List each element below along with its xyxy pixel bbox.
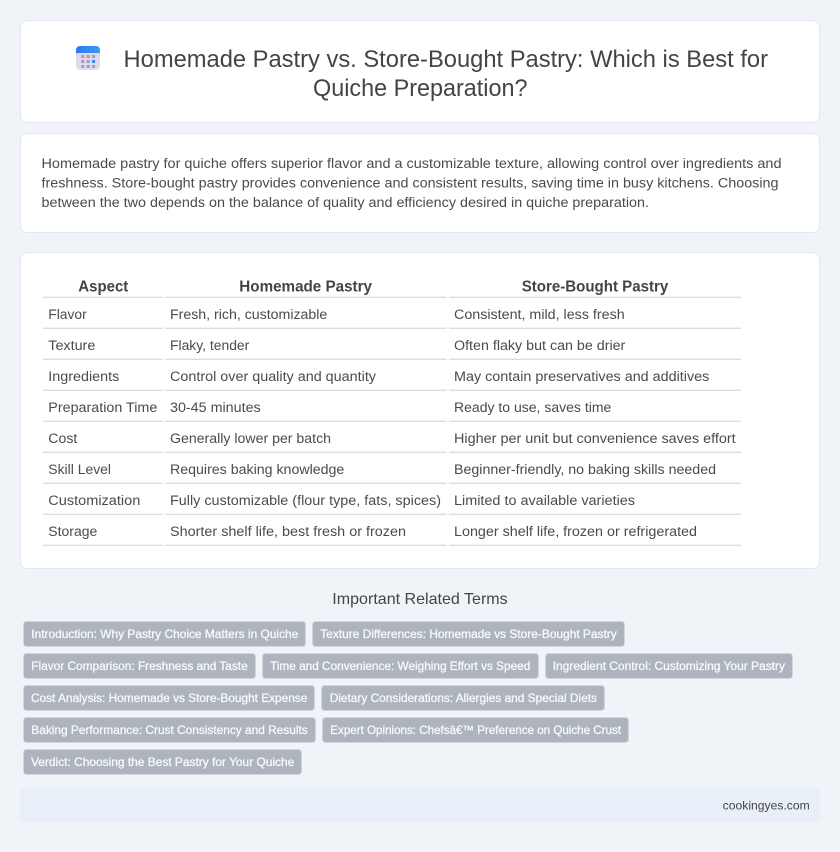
tag: flavor [24,654,256,678]
table header row [43,279,741,297]
table row: Cost: Generally lower per batch [170,431,331,447]
tag: introduction [24,622,306,646]
table row: Storage: Shorter shelf life, best fresh or frozen [170,524,406,540]
table row: Preparation Time: Preparation Time [48,400,157,416]
table row: Cost: Higher per unit but convenience saves effort [454,431,736,447]
tag: baking: Baking Performance: Crust Consistency and Results [31,723,308,737]
intro text block [42,156,782,211]
intro text block: Homemade pastry for quiche offers superior flavor and a customizable texture, allowing control over ingredients and [42,156,782,172]
tag: texture: Texture Differences: Homemade vs Store-Bought Pastry [320,627,617,641]
table row: Ingredients: Ingredients [48,369,119,385]
table row: Preparation Time [43,400,741,421]
section: related terms [24,591,792,774]
table row: Skill Level: Beginner-friendly, no baking skills needed [454,462,716,478]
table row: Texture [43,338,741,359]
table row: Skill Level [43,462,741,483]
tag: introduction: Introduction: Why Pastry Choice Matters in Quiche [31,627,299,641]
intro text block: freshness. Store-bought pastry provides convenience and consistent results, saving time in busy kitchens. Choosing [42,176,778,192]
table row: Ingredients: Control over quality and quantity [170,369,377,385]
icon: calendar [76,46,100,70]
table row: Skill Level: Skill Level [48,462,111,478]
tag: cost [24,686,314,710]
table row: Storage: Storage [48,524,97,540]
table row: Cost: Cost [48,431,77,447]
table header row: Aspect [78,279,128,296]
table row: Customization: Customization [48,493,140,509]
tag: expert [322,718,628,742]
related terms heading: Important Related Terms [332,591,508,608]
tag: dietary [322,686,604,710]
title: Homemade Pastry vs. Store-Bought Pastry: Which is Best for [124,46,768,73]
table row: Storage: Longer shelf life, frozen or refrigerated [454,524,697,540]
table row: Ingredients: May contain preservatives and additives [454,369,709,385]
tag: cost: Cost Analysis: Homemade vs Store-Bought Expense [31,691,308,705]
table row: Texture: Flaky, tender [170,338,250,354]
footer: cookingyes.com [723,798,810,812]
table row: Customization [43,493,741,514]
panel: introduction [20,134,820,232]
table header row: Store-Bought Pastry [522,279,669,296]
table row: Cost [43,431,741,452]
tag: time: Time and Convenience: Weighing Effort vs Speed [270,659,530,673]
tag: baking [24,718,316,742]
tag: verdict [24,750,302,774]
tag: flavor: Flavor Comparison: Freshness and Taste [31,659,248,673]
table row: Flavor: Consistent, mild, less fresh [454,307,625,323]
intro text block: between the two depends on the balance of quality and efficiency desired in quiche preparation. [42,195,649,211]
table row: Preparation Time: Ready to use, saves time [454,400,611,416]
tag: dietary: Dietary Considerations: Allergies and Special Diets [330,691,597,705]
table row: Storage [43,524,741,545]
tag: time [262,654,538,678]
tag: texture [312,622,624,646]
table row: Texture: Texture [48,338,95,354]
panel: header [20,20,820,122]
footer [20,788,820,822]
table row: Customization: Limited to available varieties [454,493,635,509]
table row: Ingredients [43,369,741,390]
title [124,46,768,102]
table row: Flavor [43,307,741,328]
table row: Flavor: Fresh, rich, customizable [170,307,327,323]
table header row: Homemade Pastry [239,279,372,296]
table row: Flavor: Flavor [48,307,87,323]
tag: ingredient [546,654,792,678]
title: Quiche Preparation? [313,75,528,102]
table row: Preparation Time: 30-45 minutes [170,400,261,416]
table row: Texture: Often flaky but can be drier [454,338,626,354]
tag: ingredient: Ingredient Control: Customizing Your Pastry [553,659,785,673]
table row: Skill Level: Requires baking knowledge [170,462,344,478]
tag: expert: Expert Opinions: Chefsâ€™ Preference on Quiche Crust [330,723,622,737]
tag: verdict: Verdict: Choosing the Best Pastry for Your Quiche [31,755,295,769]
panel: comparison table [20,252,820,568]
table row: Customization: Fully customizable (flour type, fats, spices) [170,493,441,509]
